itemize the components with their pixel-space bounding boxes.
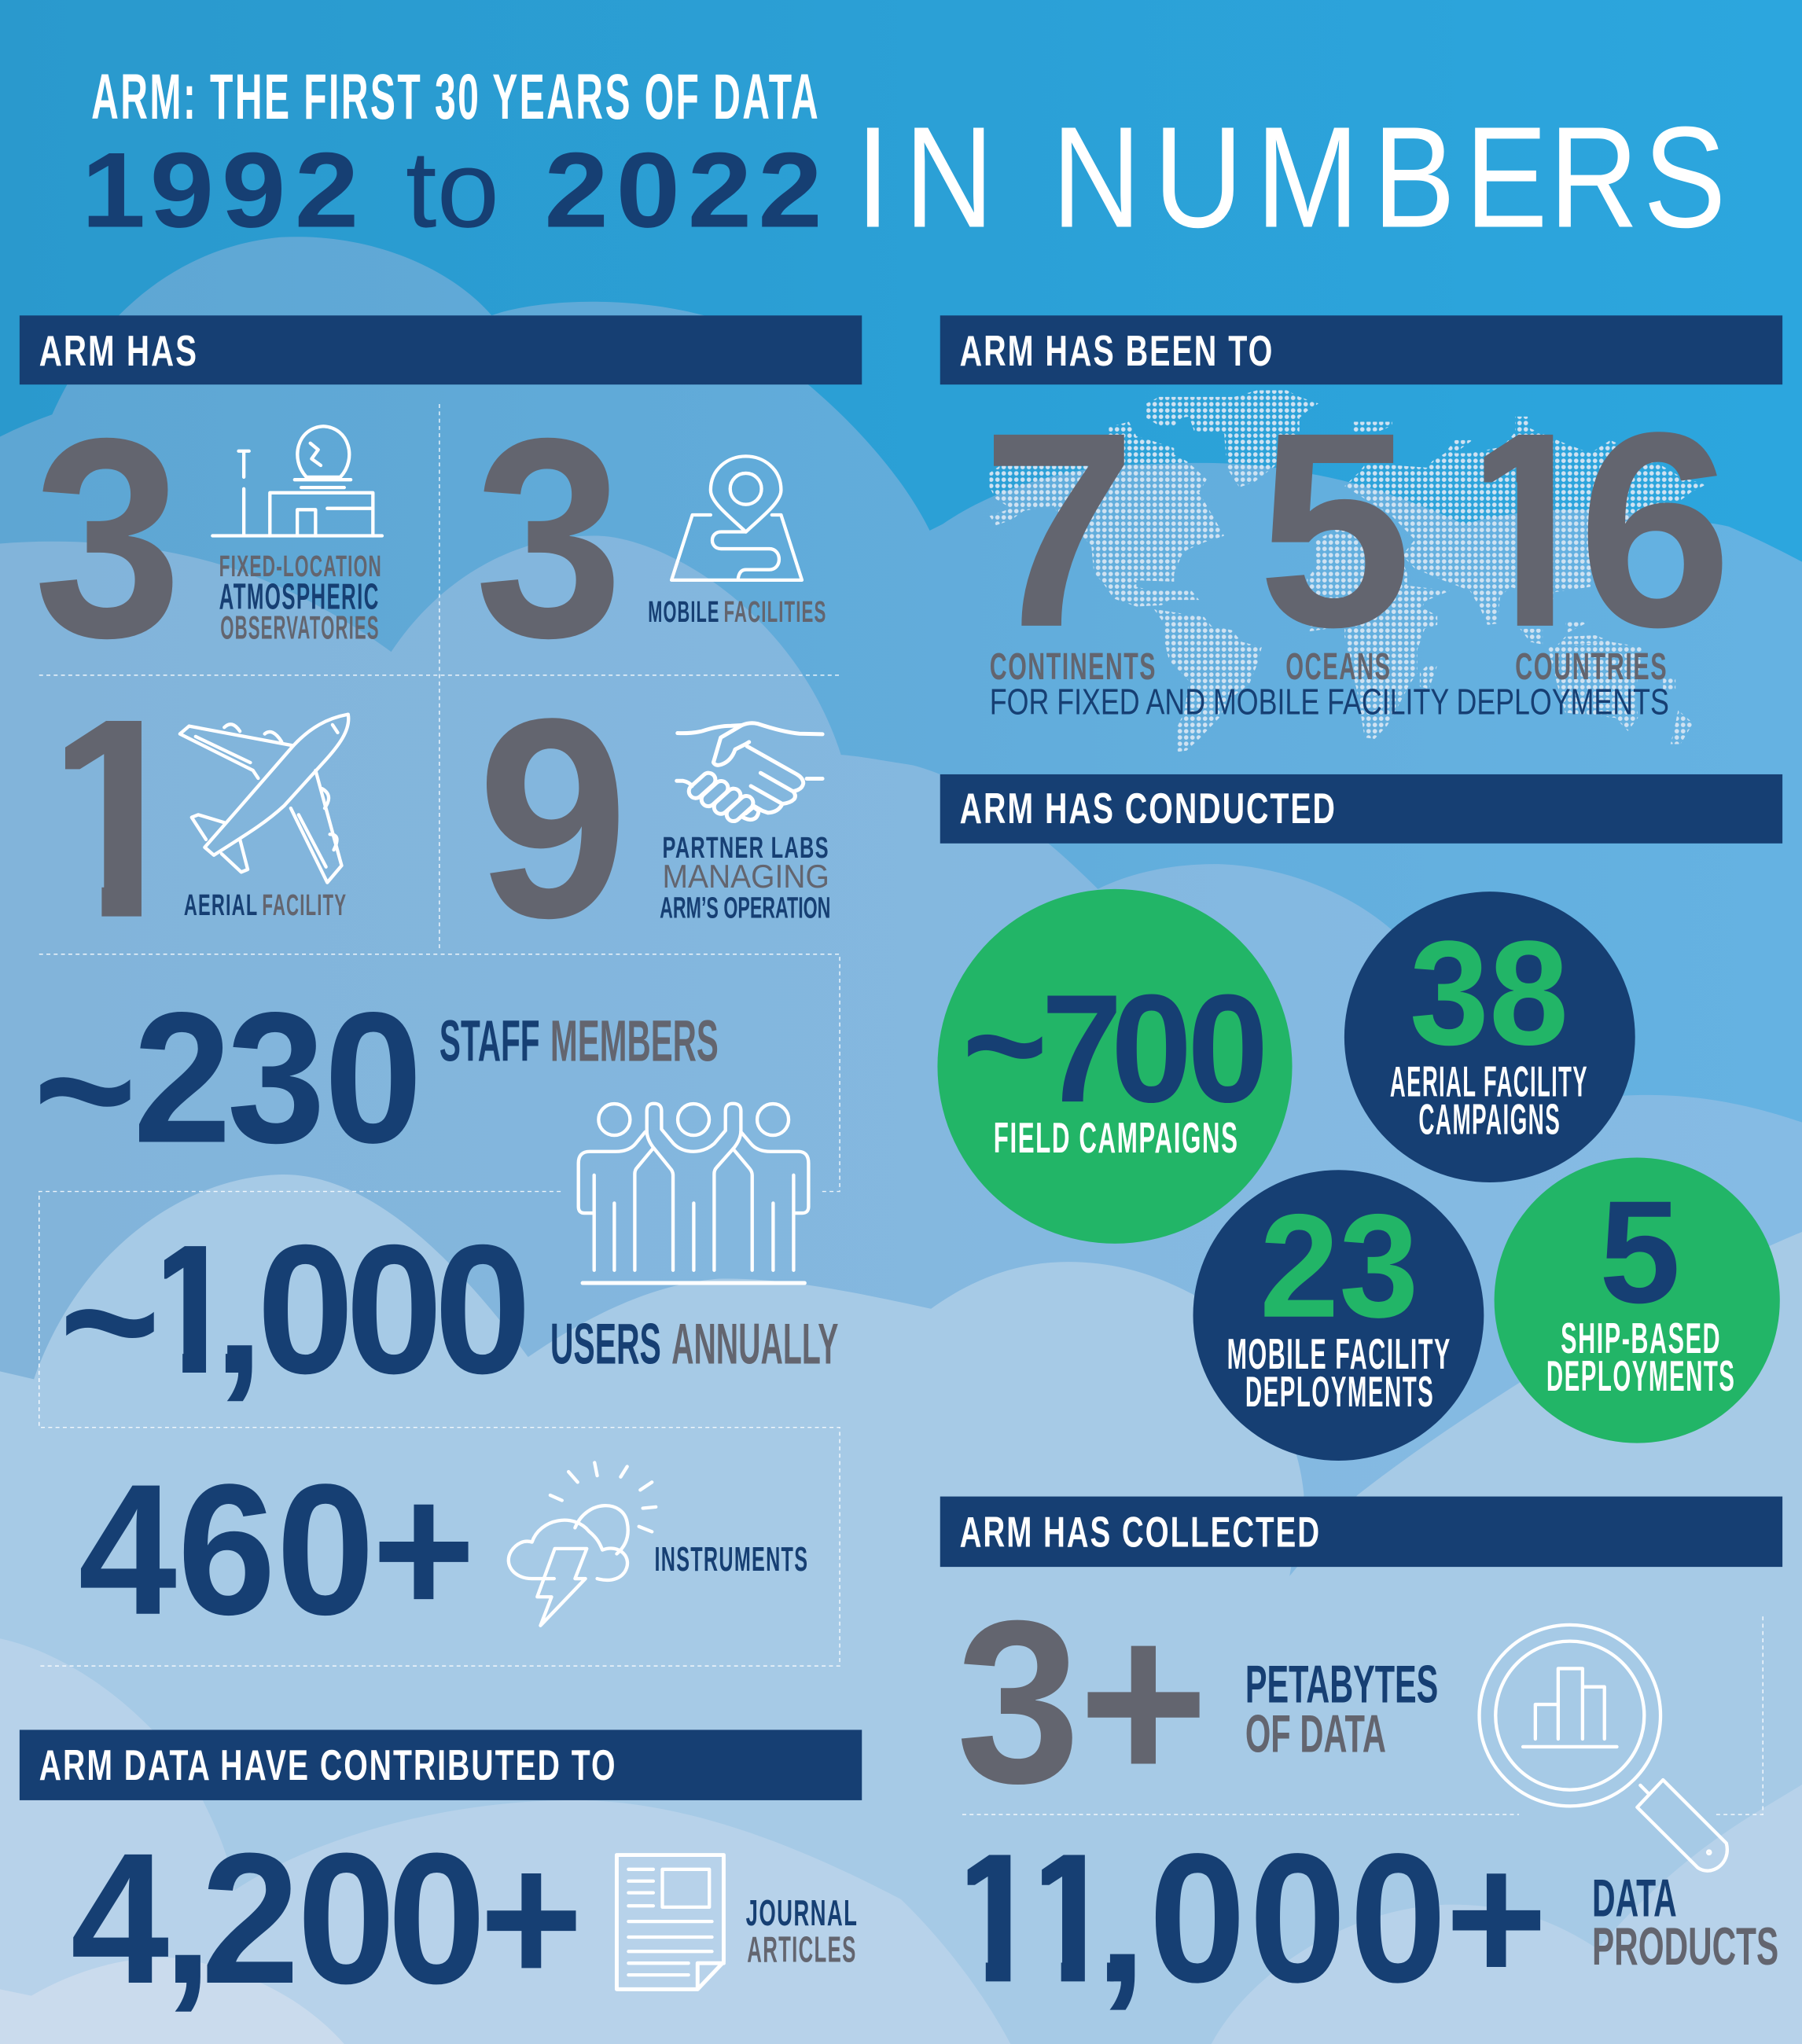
stat: 460+ instruments: INSTRUMENTS xyxy=(655,1541,808,1579)
stat: 4,200+ journal articles: ARTICLES xyxy=(747,1929,857,1970)
title block: IN NUMBERS xyxy=(855,97,1726,258)
world dot map xyxy=(989,390,1705,752)
stat: 3 fixed-location observatories: 3 xyxy=(34,379,182,697)
bubble: 38 aerial facility campaigns: 38 xyxy=(1410,910,1568,1076)
stat: 1 aerial facility xyxy=(38,660,347,977)
stat: 7 continents, 5 oceans, 16 countries: CONTINENTS xyxy=(990,645,1157,688)
stat: 3 fixed-location observatories xyxy=(34,379,382,697)
title block: to xyxy=(406,128,499,251)
stat: 7 continents, 5 oceans, 16 countries: 7 xyxy=(982,374,1136,685)
bubble: 23 mobile facility deployments: DEPLOYMENTS xyxy=(1245,1367,1434,1416)
icon: handshake xyxy=(677,723,822,824)
stat: 3+ petabytes of data xyxy=(956,1572,1438,1832)
stat: 7 continents, 5 oceans, 16 countries: 5 xyxy=(1258,374,1412,685)
icon: observatory building xyxy=(212,426,382,536)
stat: 11,000+ data products: 11,000+ xyxy=(947,1816,1547,2021)
bubble: 23 mobile facility deployments: 23 xyxy=(1260,1183,1418,1348)
stat: 4,200+ journal articles: 4,200+ xyxy=(71,1815,583,2023)
section bar: ARM HAS: ARM HAS xyxy=(39,326,198,375)
stat: 4,200+ journal articles xyxy=(71,1815,858,2023)
title block: 1992 xyxy=(82,131,359,249)
stat: 3 fixed-location observatories: ATMOSPHERIC xyxy=(219,575,380,616)
stat: 1 aerial facility: 1 xyxy=(38,660,196,977)
section bar: ARM HAS CONDUCTED: ARM HAS CONDUCTED xyxy=(960,784,1337,833)
stat: 9 partner labs: PARTNER LABS xyxy=(663,831,829,865)
icon: magnifying glass with bar chart xyxy=(1480,1625,1727,1871)
stat: 3 mobile facilities: MOBILE xyxy=(648,595,719,629)
icon: map pin xyxy=(671,456,802,580)
section bar: ARM HAS xyxy=(20,315,862,384)
stat: 3 fixed-location observatories: OBSERVATORIES xyxy=(220,609,380,645)
stat: ~1,000 users annually: ANNUALLY xyxy=(671,1312,838,1376)
stat: 1 aerial facility: AERIAL xyxy=(184,888,258,922)
stat: 9 partner labs: ARM’S OPERATION xyxy=(660,891,830,925)
stat: ~230 staff members: ~230 xyxy=(33,974,422,1194)
section bar: ARM HAS COLLECTED xyxy=(940,1497,1782,1567)
stat: ~1,000 users annually: USERS xyxy=(550,1312,661,1376)
stat: ~230 staff members: STAFF xyxy=(439,1008,540,1074)
bubble: ~700 field campaigns: FIELD CAMPAIGNS xyxy=(994,1113,1239,1162)
section bar: ARM HAS BEEN TO: ARM HAS BEEN TO xyxy=(960,326,1274,375)
stat: 9 partner labs xyxy=(477,660,830,977)
section bar: ARM HAS COLLECTED: ARM HAS COLLECTED xyxy=(960,1507,1321,1556)
stat: 9 partner labs: 9 xyxy=(477,660,628,977)
stat: 3+ petabytes of data: 3+ xyxy=(956,1572,1208,1832)
stat: 7 continents, 5 oceans, 16 countries: OCEANS xyxy=(1285,645,1392,688)
stat: 3+ petabytes of data: OF DATA xyxy=(1245,1704,1386,1764)
bubble: 38 aerial facility campaigns xyxy=(1344,891,1635,1182)
section bar: ARM DATA HAVE CONTRIBUTED TO xyxy=(20,1730,862,1800)
stat: 3 fixed-location observatories: FIXED-LOCATION xyxy=(219,550,382,583)
bubble: 23 mobile facility deployments xyxy=(1193,1170,1484,1461)
bubble: 23 mobile facility deployments: MOBILE FACILITY xyxy=(1227,1329,1451,1378)
stat: 11,000+ data products xyxy=(967,1853,1777,2010)
stat: 3+ petabytes of data: PETABYTES xyxy=(1245,1655,1438,1715)
bubble: 5 ship-based deployments: 5 xyxy=(1599,1171,1680,1334)
stat: 460+ instruments: 460+ xyxy=(79,1447,476,1654)
title block xyxy=(82,61,1726,258)
section bar: ARM HAS BEEN TO xyxy=(940,315,1782,384)
stat: 7 continents, 5 oceans, 16 countries xyxy=(991,432,1722,715)
stat: ~1,000 users annually xyxy=(59,1208,838,1424)
stat: ~230 staff members xyxy=(33,974,719,1194)
icon: storm cloud with sun xyxy=(509,1462,656,1626)
stat: 460+ instruments xyxy=(79,1447,808,1654)
stat: 3 mobile facilities: FACILITIES xyxy=(723,595,826,629)
bubble: 38 aerial facility campaigns: CAMPAIGNS xyxy=(1418,1095,1561,1144)
bubble: ~700 field campaigns: ~700 xyxy=(962,959,1269,1134)
bubble: ~700 field campaigns xyxy=(937,889,1293,1244)
stat: 3 mobile facilities: 3 xyxy=(475,379,623,697)
stat: 7 continents, 5 oceans, 16 countries: COUNTRIES xyxy=(1515,645,1668,688)
icon: group of people xyxy=(579,1104,808,1283)
title block: 2022 xyxy=(544,131,822,249)
bubble: 38 aerial facility campaigns: AERIAL FACILITY xyxy=(1390,1057,1588,1106)
stat: 4,200+ journal articles: JOURNAL xyxy=(746,1892,858,1933)
icon: airplane xyxy=(180,715,348,883)
bubble: 5 ship-based deployments xyxy=(1495,1157,1780,1443)
stat: 11,000+ data products: DATA xyxy=(1592,1869,1677,1928)
section bar: ARM HAS CONDUCTED xyxy=(940,774,1782,844)
stat: 1 aerial facility: FACILITY xyxy=(262,888,347,922)
stat: ~230 staff members: MEMBERS xyxy=(550,1008,719,1074)
stat: ~1,000 users annually: ~1,000 xyxy=(59,1208,531,1424)
section bar: ARM DATA HAVE CONTRIBUTED TO: ARM DATA HAVE CONTRIBUTED TO xyxy=(39,1741,616,1789)
stat: 3 mobile facilities xyxy=(475,379,826,697)
stat: 7 continents, 5 oceans, 16 countries: 16 xyxy=(1451,374,1732,685)
stat: 9 partner labs: MANAGING xyxy=(663,858,829,895)
title block: ARM: THE FIRST 30 YEARS OF DATA xyxy=(91,61,820,133)
icon: newspaper xyxy=(616,1855,723,1989)
